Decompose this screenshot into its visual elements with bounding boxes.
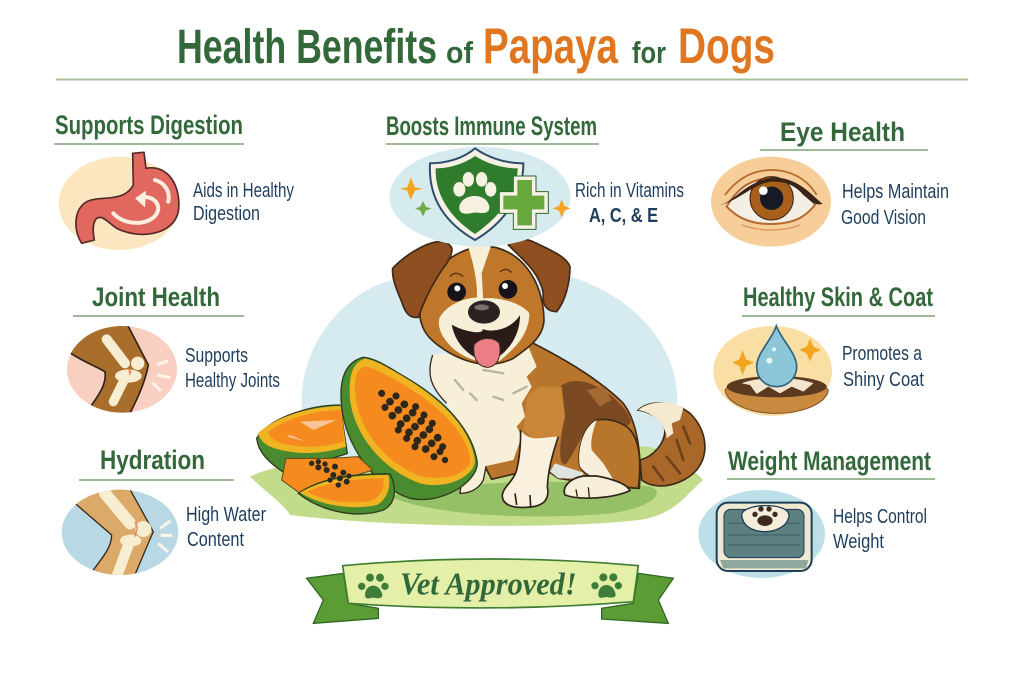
panel: boosts immune system	[386, 111, 684, 247]
title: of	[446, 35, 474, 70]
banner: vet approved	[307, 559, 673, 623]
panel: eye health	[711, 117, 949, 247]
description: joints: Supports	[185, 345, 248, 367]
dog head	[393, 239, 570, 367]
description: coat	[842, 343, 924, 391]
description: digestion	[193, 180, 294, 225]
dog front leg	[502, 430, 558, 508]
title: Health Benefits	[177, 21, 437, 74]
description: vision	[841, 181, 949, 229]
papaya slices	[282, 457, 394, 514]
description: vision: Helps Maintain	[842, 181, 949, 203]
heading: weight management: Weight Management	[728, 446, 931, 476]
left papaya half	[257, 405, 347, 473]
icon: shield with paw and cross	[389, 147, 571, 247]
description: vitamins: A, C, & E	[589, 205, 658, 227]
description: digestion: Aids in Healthy	[193, 180, 294, 202]
icon: hydrated knee	[62, 483, 178, 578]
description: weight	[833, 506, 927, 553]
heading: immune system: Boosts Immune System	[386, 111, 597, 141]
tongue	[474, 339, 500, 367]
title: for	[632, 35, 666, 70]
mouth	[453, 317, 519, 362]
icon: paw scale	[698, 490, 825, 578]
heading: eye health: Eye Health	[780, 117, 905, 147]
title	[177, 18, 775, 74]
left paw	[358, 574, 389, 598]
right paw	[591, 573, 622, 598]
tail	[638, 402, 705, 486]
description: vitamins: Rich in Vitamins	[575, 180, 684, 202]
panel: hydration	[62, 445, 266, 578]
description: coat: Shiny Coat	[843, 369, 924, 391]
description: coat: Promotes a	[842, 343, 923, 365]
description: hydration	[186, 504, 266, 551]
icon: stomach	[59, 152, 180, 250]
description: digestion: Digestion	[193, 203, 260, 225]
description: weight: Helps Control	[833, 506, 927, 528]
title: Dogs	[678, 18, 775, 74]
central illustration: dog and papaya	[250, 239, 705, 526]
icon: eye	[711, 157, 831, 247]
papaya seeds	[378, 390, 448, 463]
description: hydration: High Water	[186, 504, 266, 526]
banner text: Vet Approved!	[400, 565, 577, 601]
dog hidden front leg	[460, 437, 487, 493]
dog white chest	[430, 347, 565, 467]
heading: joint health: Joint Health	[92, 282, 220, 312]
heading: supports digestion: Supports Digestion	[55, 110, 243, 140]
description: joints	[185, 345, 280, 392]
nose	[468, 300, 500, 324]
panel: weight management	[698, 446, 935, 578]
description: vitamins	[575, 180, 684, 227]
blue background blob	[302, 277, 677, 457]
dog back paw	[564, 476, 630, 498]
large papaya half	[341, 357, 477, 500]
grass	[250, 446, 703, 526]
panel: joint health	[63, 282, 280, 417]
description: vision: Good Vision	[841, 207, 926, 229]
title: Papaya	[483, 18, 619, 74]
description: weight: Weight	[833, 531, 884, 553]
panel: supports digestion	[54, 110, 294, 250]
eyes	[447, 283, 466, 301]
heading: skin and coat: Healthy Skin & Coat	[743, 282, 933, 312]
heading: hydration: Hydration	[100, 445, 205, 475]
panel: healthy skin and coat	[713, 282, 935, 416]
description: joints: Healthy Joints	[185, 370, 280, 392]
right ear	[508, 239, 570, 312]
dog body	[463, 342, 640, 488]
icon: knee joint	[67, 326, 177, 413]
description: hydration: Content	[187, 529, 244, 551]
icon: water drop on coat	[713, 326, 832, 416]
left ear	[393, 242, 452, 317]
